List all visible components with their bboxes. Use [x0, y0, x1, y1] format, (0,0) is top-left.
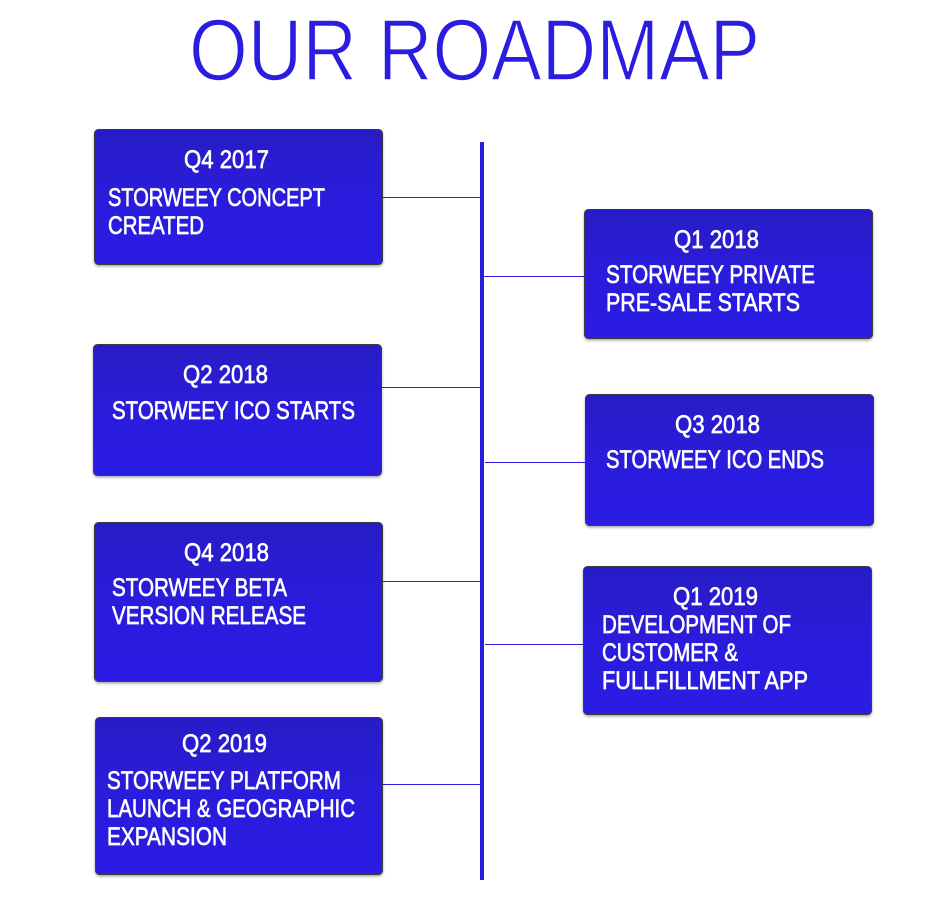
panel: Q3 2018	[586, 394, 874, 526]
date: Q2 2019: Q2 2019	[182, 730, 267, 758]
date: Q1 2019: Q1 2019	[673, 583, 758, 611]
date: Q1 2018: Q1 2018	[674, 226, 759, 254]
milestone text: platform launch: EXPANSION	[107, 823, 227, 851]
milestone text: platform launch: LAUNCH & GEOGRAPHIC	[107, 795, 355, 823]
milestone text: concept created	[108, 184, 325, 240]
milestone text: private pre-sale: PRE-SALE STARTS	[606, 289, 800, 317]
milestone text: platform launch: STORWEEY PLATFORM	[107, 767, 341, 795]
panel: Q4 2018	[94, 522, 382, 682]
connector: Q1 2018	[484, 276, 584, 278]
milestone text: ICO starts: STORWEEY ICO STARTS	[112, 397, 355, 425]
milestone text: beta release	[112, 574, 306, 630]
milestone text: ICO ends: STORWEEY ICO ENDS	[606, 446, 824, 474]
date: Q4 2018: Q4 2018	[184, 539, 269, 567]
connector: Q3 2018	[485, 462, 585, 464]
milestone text: concept created: CREATED	[108, 212, 204, 240]
date: Q2 2018: Q2 2018	[183, 361, 268, 389]
milestone text: private pre-sale: STORWEEY PRIVATE	[606, 261, 815, 289]
panel: Q1 2018	[584, 210, 872, 338]
connector: Q4 2017	[383, 196, 480, 198]
date: Q3 2018: Q3 2018	[675, 411, 760, 439]
connector: Q2 2019	[383, 784, 480, 786]
milestone text: customer and fulfillment app: FULLFILLMENT APP	[602, 667, 808, 695]
timeline spine	[480, 142, 484, 880]
milestone text: private pre-sale	[606, 261, 815, 317]
milestone text: platform launch	[107, 767, 355, 851]
panel: Q2 2018	[94, 344, 382, 476]
date: Q4 2017: Q4 2017	[184, 146, 269, 174]
title: OUR ROADMAP	[189, 2, 760, 99]
milestone text: beta release: VERSION RELEASE	[112, 602, 306, 630]
connector: Q4 2018	[383, 580, 480, 582]
milestone text: concept created: STORWEEY CONCEPT	[108, 184, 325, 212]
milestone text: customer and fulfillment app: CUSTOMER &	[602, 639, 738, 667]
connector: Q1 2019	[485, 644, 583, 646]
panel: Q2 2019	[96, 718, 382, 874]
milestone text: customer and fulfillment app: DEVELOPMENT OF	[602, 611, 791, 639]
milestone text: customer and fulfillment app	[602, 611, 808, 695]
connector: Q2 2018	[382, 386, 480, 388]
milestone text: beta release: STORWEEY BETA	[112, 574, 287, 602]
panel: Q1 2019	[584, 566, 872, 714]
panel: Q4 2017	[94, 130, 382, 264]
